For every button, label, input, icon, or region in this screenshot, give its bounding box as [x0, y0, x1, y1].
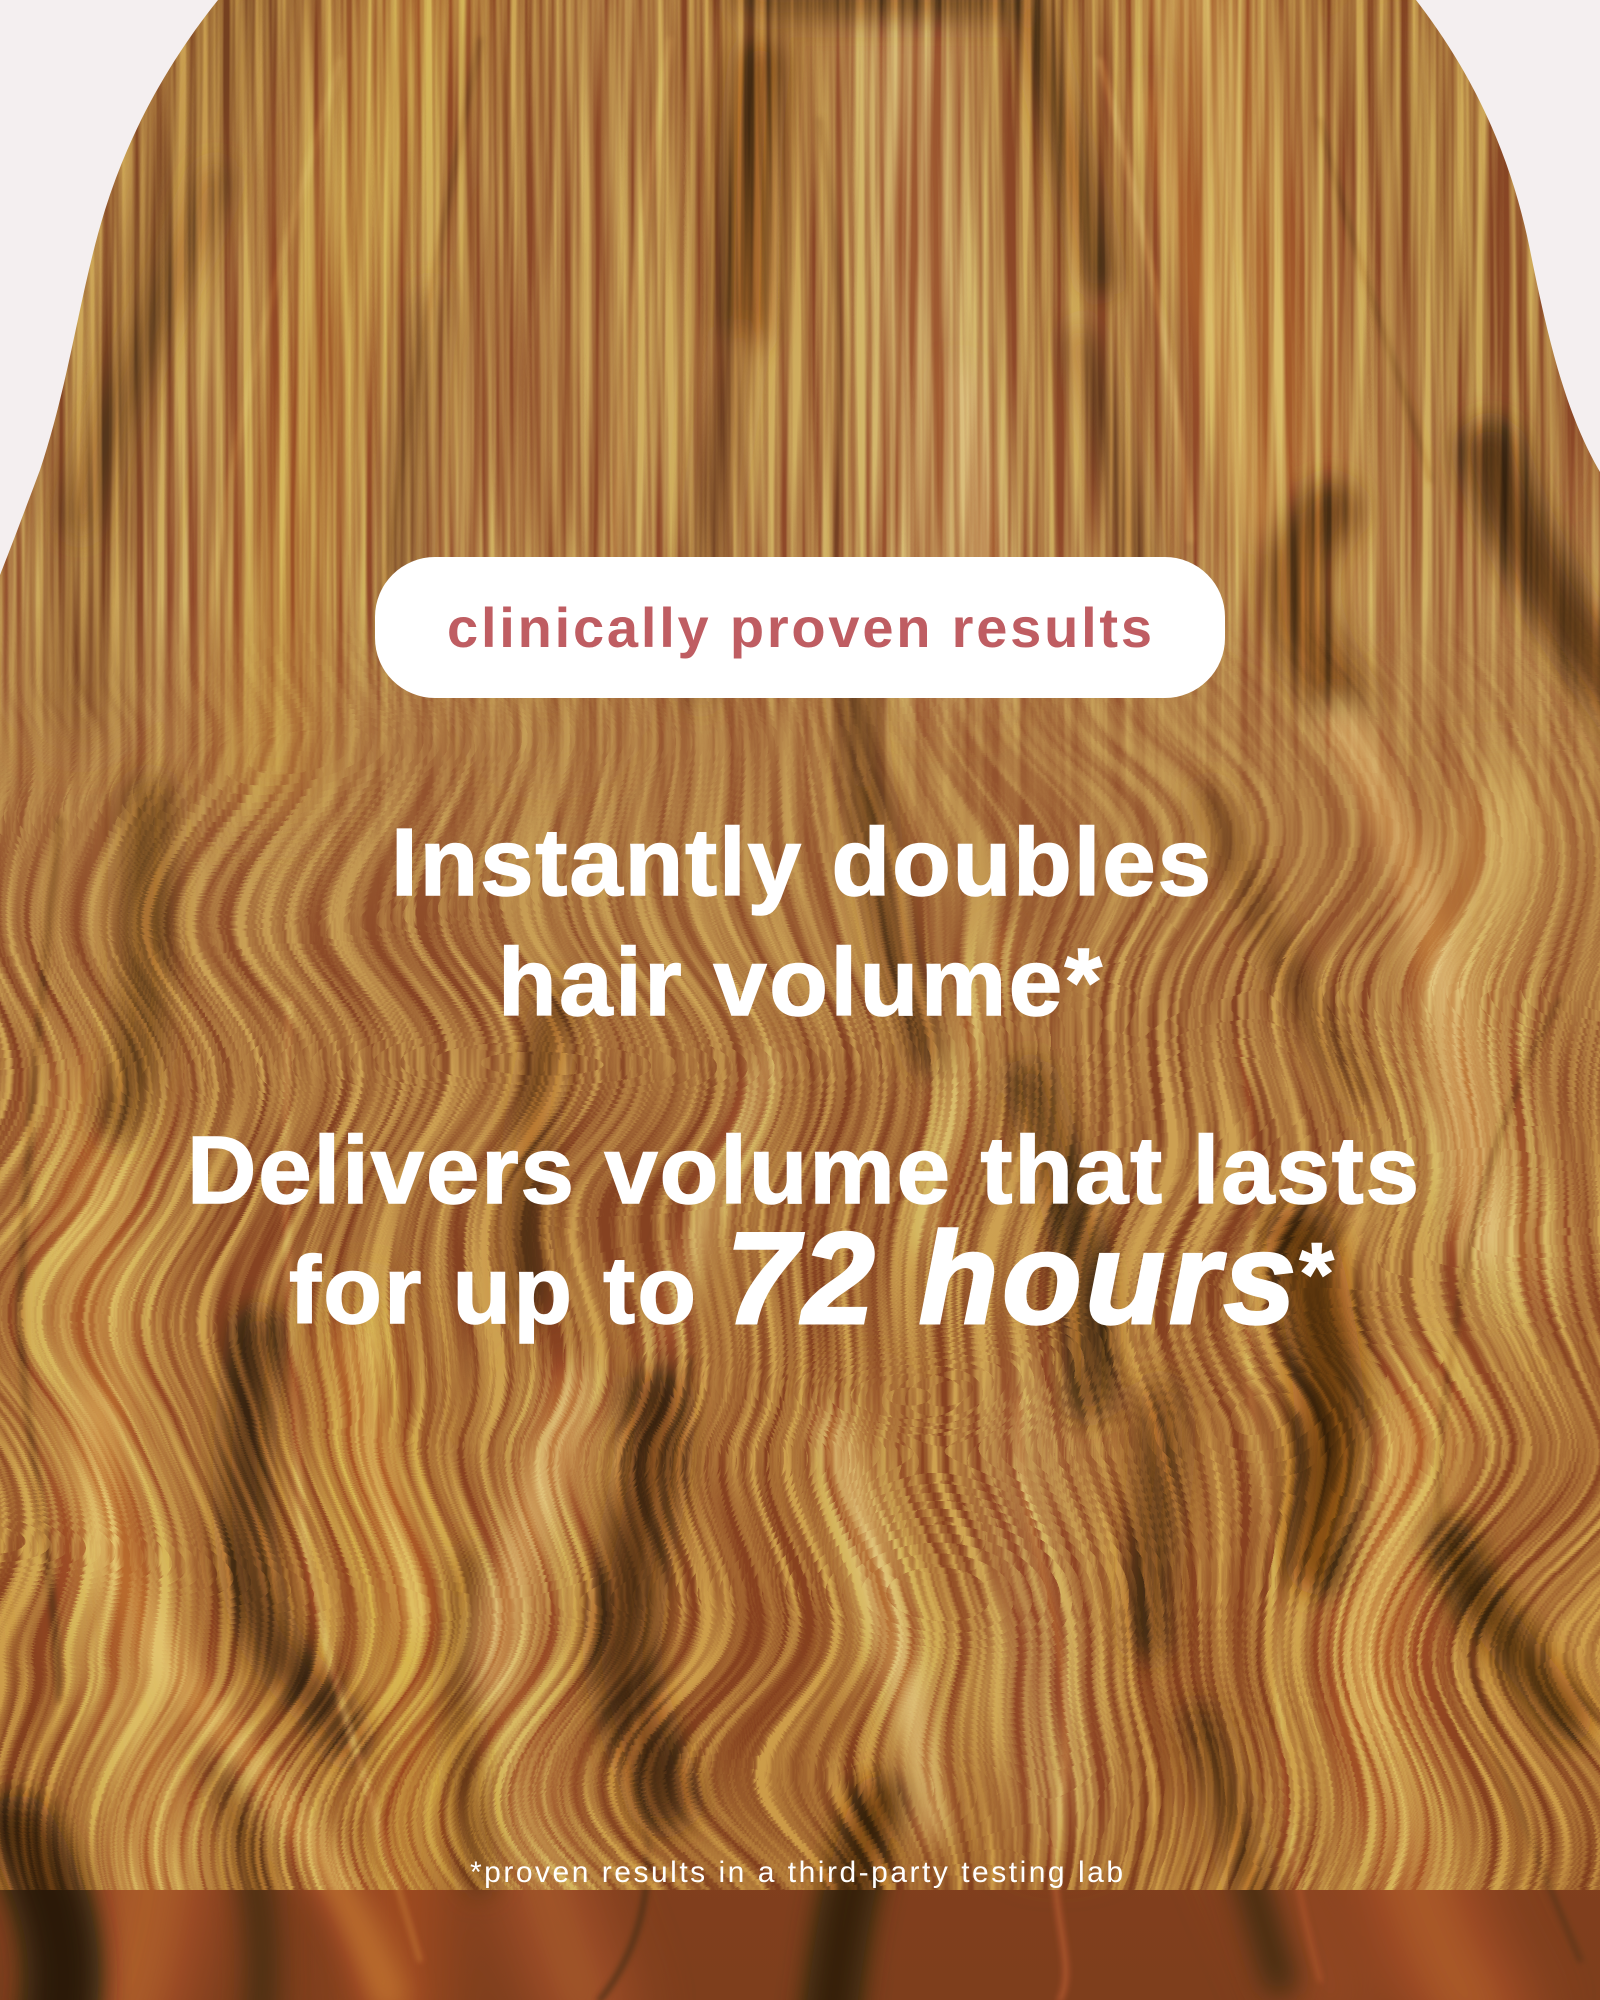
badge: clinically proven results: clinically proven results — [447, 596, 1152, 659]
heading: delivers volume that lasts for up to 72 hours — [187, 1117, 1419, 1351]
heading: delivers volume that lasts for up to 72 hours: for up to — [289, 1237, 696, 1344]
heading: delivers volume that lasts for up to 72 hours: 72 hours — [726, 1205, 1296, 1351]
heading: delivers volume that lasts for up to 72 hours: Delivers volume that lasts — [187, 1117, 1419, 1224]
lighter strands — [1340, 720, 1480, 1240]
darker strands, lower — [244, 1330, 345, 1740]
heading: delivers volume that lasts for up to 72 hours: * — [1296, 1224, 1334, 1323]
badge: clinically proven results — [375, 557, 1225, 698]
heading: instantly doubles hair volume — [391, 809, 1211, 1036]
footnote: *proven results in a third-party testing lab — [470, 1856, 1123, 1889]
fine strand groups — [200, 60, 340, 700]
darker strands, middle — [870, 800, 930, 1060]
heading: instantly doubles hair volume: Instantly doubles — [391, 809, 1211, 916]
heading: instantly doubles hair volume: hair volume* — [498, 929, 1103, 1036]
darker strands, upper — [745, 60, 760, 330]
